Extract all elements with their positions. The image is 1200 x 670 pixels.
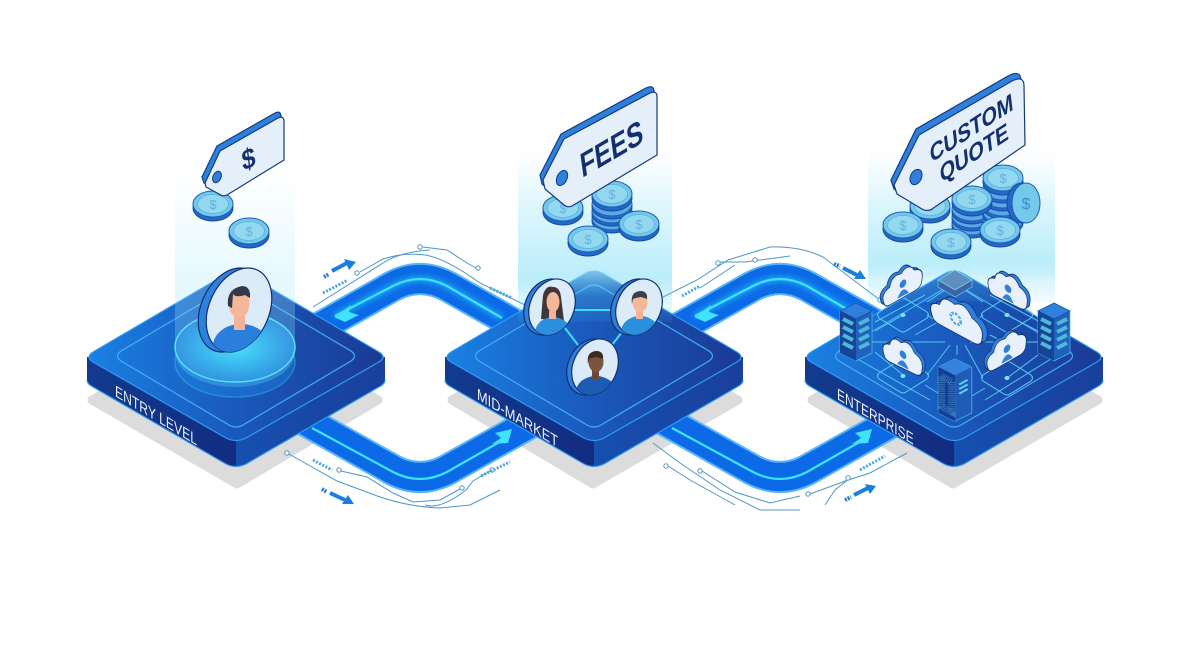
pipe: mid-market to enterprise (bottom): [655, 415, 905, 479]
server: left: [840, 303, 872, 361]
pipe arrow: top right: [694, 305, 719, 322]
traces: second top loop: [663, 247, 882, 302]
glowing ring: entry level: [175, 312, 295, 397]
price tag: dollar: [202, 112, 284, 196]
light beam: entry level: [175, 170, 295, 387]
cloud: bottom left: [883, 327, 925, 381]
cloud: top right: [988, 261, 1030, 315]
coins: enterprise: [883, 165, 1040, 259]
tag text: custom: CUSTOM: [928, 88, 1014, 168]
small arrow: bottom left: [322, 489, 354, 504]
shadow: mid-market platform: [452, 318, 738, 484]
platform: mid-market: [445, 271, 743, 466]
network: enterprise: [840, 256, 1070, 421]
traces: first top loop: [313, 245, 525, 307]
small arrow: top left: [324, 259, 356, 277]
price tag: fees: FEES: [578, 113, 645, 186]
traces: first bottom loop: [285, 451, 510, 508]
platform label: mid-market: MID-MARKET: [477, 386, 558, 452]
avatar: man: [610, 278, 663, 336]
price tag: custom quote: [891, 73, 1025, 210]
pipe: entry to mid-market (bottom): [295, 415, 545, 479]
avatar: entry level user: [198, 267, 272, 353]
platform: entry level: [87, 271, 385, 466]
pipe: mid-market to entry (top): [315, 279, 525, 330]
small arrow: bottom right: [845, 484, 876, 500]
coins: entry level: [193, 191, 269, 248]
light beam: mid-market: [518, 150, 672, 322]
pipe arrow: bottom right: [852, 429, 872, 444]
avatar: woman: [523, 278, 576, 336]
connector pipes: [295, 279, 905, 479]
platform label: enterprise: ENTERPRISE: [837, 385, 914, 449]
coins: mid-market: [543, 181, 659, 256]
platform label: entry level: ENTRY LEVEL: [115, 382, 197, 450]
tag text: quote: QUOTE: [938, 117, 1010, 188]
coin: standing: $: [1022, 196, 1031, 213]
cloud: central: [931, 282, 987, 352]
small arrow: top right: [834, 264, 866, 279]
avatar: third user: [566, 338, 619, 396]
coin: standing: [1007, 183, 1040, 223]
cloud: bottom right: [984, 321, 1026, 375]
circuit traces: [285, 245, 907, 510]
server: right: [1038, 303, 1070, 361]
price tag: fees: [540, 87, 657, 207]
pipe arrow: top left: [334, 305, 359, 322]
cloud: top left: [880, 256, 922, 310]
network chip: [938, 270, 972, 297]
pipe arrow: bottom left: [492, 429, 512, 444]
network pads: [878, 298, 1032, 395]
shadow: enterprise platform: [812, 318, 1098, 484]
light beam: enterprise: [868, 150, 1055, 302]
pipe: enterprise to mid-market (top): [675, 279, 885, 330]
platform: enterprise: [805, 271, 1103, 466]
shadow: entry platform: [92, 318, 378, 484]
price tag: dollar: $: [240, 141, 257, 177]
network lines: [845, 290, 1062, 400]
traces: second bottom loop: [653, 443, 907, 510]
server: front: [938, 359, 972, 421]
avatar links: mid-market: [565, 310, 622, 345]
